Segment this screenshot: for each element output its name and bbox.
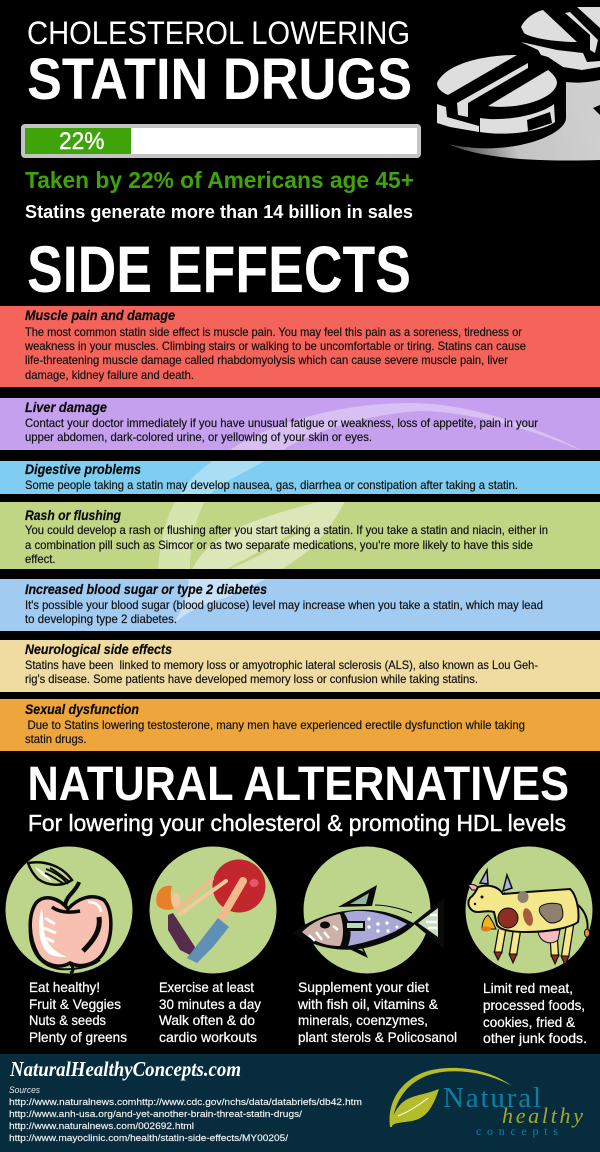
panel: sexual dysfunction — [0, 699, 600, 751]
panel: muscle pain: damage, kidney failure and death. — [25, 369, 194, 382]
caption: limit red meat: other junk foods. — [483, 1030, 587, 1046]
logo: Natural — [443, 1082, 541, 1114]
progress bar: 22%: 22% — [59, 128, 104, 155]
panel: digestive problems: Digestive problems — [25, 462, 141, 477]
caption: eat healthy: Fruit & Veggies — [29, 996, 121, 1012]
stat: taken by 22%: Taken by 22% of Americans age 45+ — [25, 167, 414, 193]
panel: neurological: Neurological side effects — [25, 642, 172, 657]
panel: neurological: Statins have been linked to memory loss or amyotrophic lateral sclerosis (ALS), also known as Lou Geh- — [25, 659, 538, 672]
progress bar: 22% — [23, 126, 419, 156]
icon: cow — [466, 846, 592, 974]
caption: eat healthy: Nuts & seeds — [29, 1012, 106, 1028]
sources: http://www.anh-usa.org/and-yet-another-brain-threat-statin-drugs/ — [9, 1109, 302, 1120]
caption: eat healthy: Eat healthy! — [29, 979, 100, 995]
panel: sexual dysfunction: Sexual dysfunction — [25, 702, 139, 717]
stat: sales: Statins generate more than 14 billion in sales — [25, 202, 413, 222]
sources: Sources — [9, 1085, 40, 1096]
band backgrounds behind the leaf watermark — [0, 398, 600, 631]
caption: limit red meat: processed foods, — [483, 997, 585, 1013]
caption: eat healthy — [29, 979, 127, 1045]
logo: concepts — [476, 1124, 558, 1138]
panel: muscle pain — [0, 306, 600, 387]
panel: digestive problems: Some people taking a statin may develop nausea, gas, diarrhea or constipation after taking a statin. — [25, 479, 518, 492]
footer panel — [0, 1054, 600, 1152]
icon: exercise ball — [150, 846, 276, 974]
caption: supplements — [297, 979, 457, 1045]
panel: liver damage: Contact your doctor immediately if you have unusual fatigue or weakness, loss of appetite, pain in your — [25, 417, 538, 430]
caption: exercise: cardio workouts — [159, 1029, 257, 1045]
sources: http://www.mayoclinic.com/health/statin-side-effects/MY00205/ — [9, 1133, 288, 1144]
sources: http://www.naturalnews.com/002692.html — [9, 1121, 194, 1132]
footer site name: NaturalHealthyConcepts.com — [9, 1057, 241, 1081]
caption: exercise — [159, 979, 261, 1045]
caption: limit red meat — [483, 980, 587, 1046]
caption: limit red meat: Limit red meat, — [483, 980, 573, 996]
caption: exercise: 30 minutes a day — [159, 996, 261, 1012]
panel: digestive problems — [0, 461, 600, 494]
title — [27, 15, 412, 112]
icon: apple — [6, 846, 132, 974]
panel: neurological: rig's disease. Some patients have developed memory loss or confusion while taking statins. — [25, 673, 478, 686]
caption: limit red meat: cookies, fried & — [483, 1014, 576, 1030]
panel: muscle pain: The most common statin side effect is muscle pain. You may feel this pain as a soreness, tiredness or — [25, 326, 522, 339]
panel: sexual dysfunction: Due to Statins lowering testosterone, many men have experienced erectile dysfunction while taking — [28, 719, 525, 732]
panel: rash or flushing — [0, 502, 600, 569]
caption: exercise: Exercise at least — [159, 979, 254, 995]
panel: rash or flushing: effect. — [25, 553, 56, 566]
icon: fish — [293, 846, 444, 974]
panel: blood sugar: to developing type 2 diabetes. — [25, 613, 177, 626]
logo — [390, 1068, 583, 1138]
panel: neurological — [0, 640, 600, 692]
panel: muscle pain: life-threatening muscle damage called rhabdomyolysis which can cause severe muscle pain, liver — [25, 354, 508, 367]
watermark: leaf — [158, 403, 585, 625]
logo: healthy — [502, 1103, 583, 1128]
panel: rash or flushing: Rash or flushing — [25, 508, 122, 523]
caption: eat healthy: Plenty of greens — [29, 1029, 127, 1045]
caption: supplements: plant sterols & Policosanol — [298, 1029, 457, 1045]
sources: http://www.naturalnews.comhttp://www.cdc.gov/nchs/data/databriefs/db42.htm — [9, 1097, 362, 1108]
panel: blood sugar: It's possible your blood sugar (blood glucose) level may increase when you take a statin, which may lead — [25, 599, 543, 612]
sources — [9, 1085, 362, 1144]
panel: muscle pain: Muscle pain and damage — [25, 308, 175, 323]
panel: liver damage — [0, 398, 600, 450]
caption: supplements: minerals, coenzymes, — [298, 1012, 428, 1028]
caption: exercise: Walk often & do — [159, 1012, 255, 1028]
panel: rash or flushing: You could develop a rash or flushing after you start taking a statin. If you take a statin and niacin, either in — [25, 524, 548, 537]
panel: blood sugar — [0, 579, 600, 631]
title: STATIN DRUGS — [27, 47, 412, 112]
subheading: For lowering your cholesterol & promoting HDL levels — [28, 810, 566, 836]
panel: liver damage: upper abdomen, dark-colored urine, or yellowing of your skin or eyes. — [25, 431, 372, 444]
panel: blood sugar: Increased blood sugar or type 2 diabetes — [25, 582, 267, 597]
panel: sexual dysfunction: statin drugs. — [25, 733, 86, 746]
panel: rash or flushing: a combination pill such as Simcor or as two separate medications, you're more likely to have this side — [25, 539, 533, 552]
icon: pills — [437, 7, 600, 160]
panel: liver damage: Liver damage — [25, 400, 107, 415]
caption: supplements: with fish oil, vitamins & — [297, 996, 439, 1012]
heading: side effects: SIDE EFFECTS — [27, 232, 411, 306]
title: CHOLESTEROL LOWERING — [27, 15, 410, 51]
caption: supplements: Supplement your diet — [298, 979, 429, 995]
panel: muscle pain: weakness in your muscles. Climbing stairs or walking to be uncomfortable or tiring. Statins can cause — [24, 340, 526, 353]
